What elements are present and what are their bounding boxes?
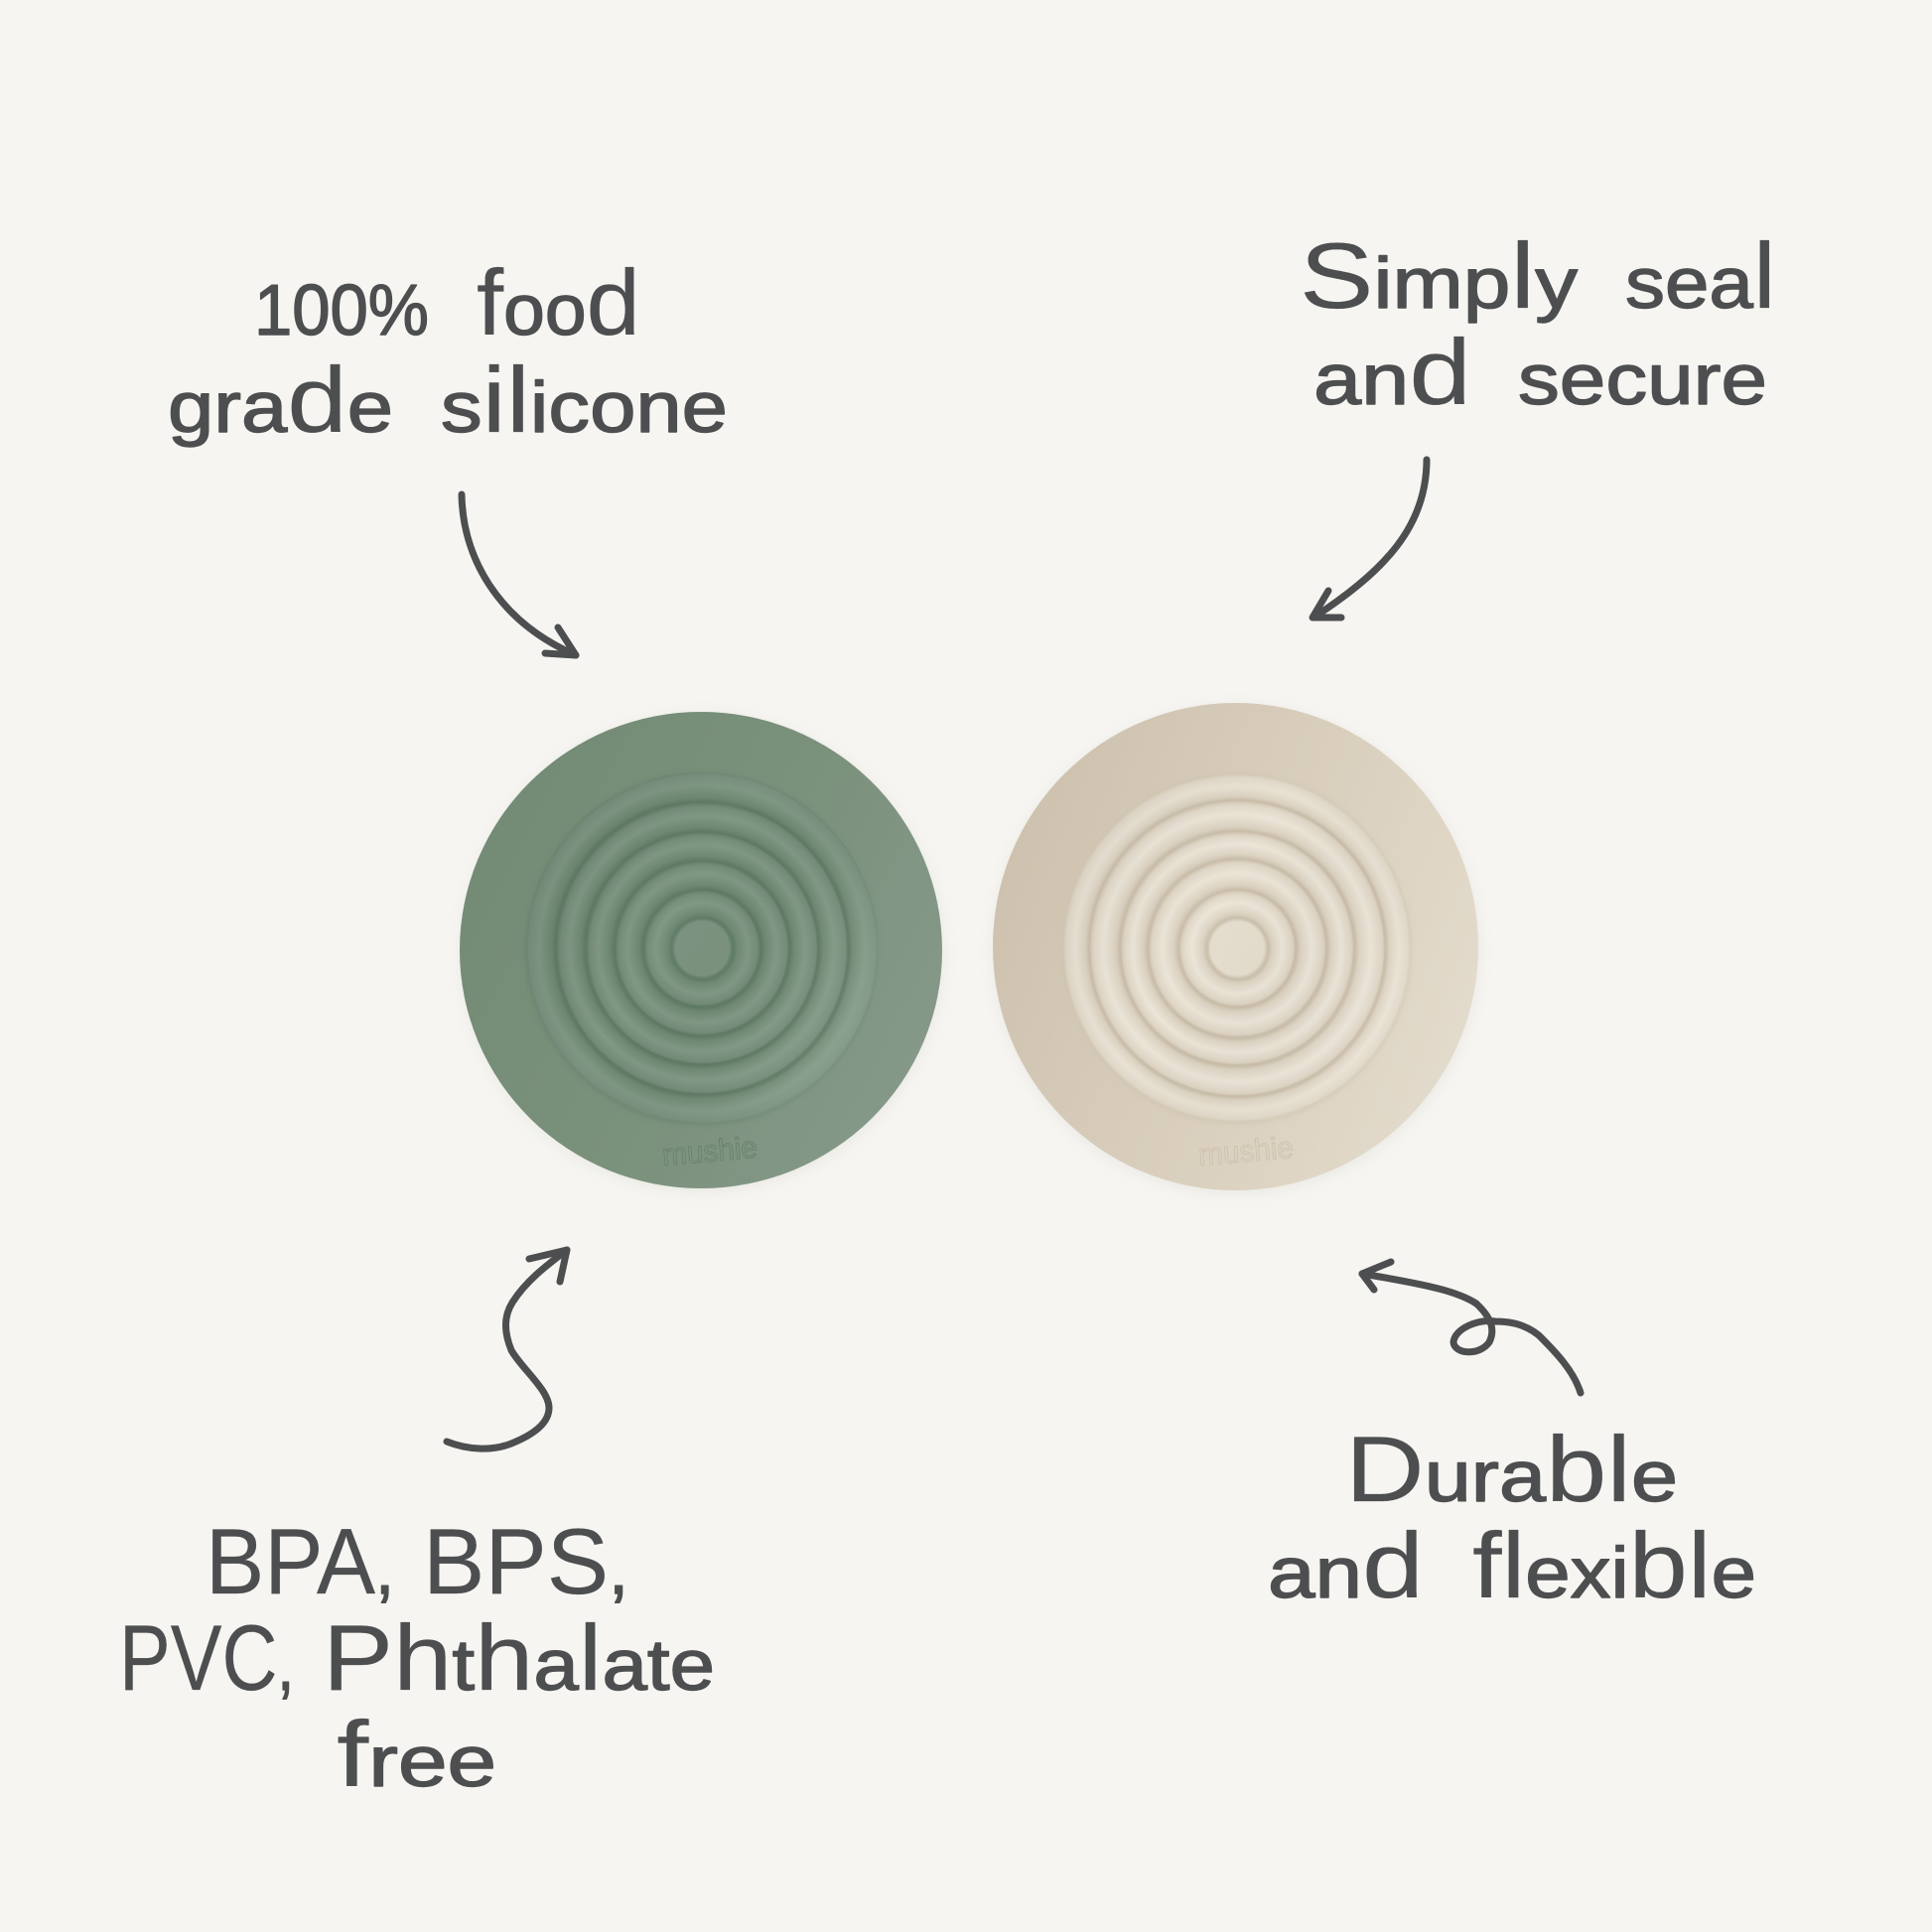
arrow: food grade to green lid	[462, 494, 576, 655]
callout: BPA, BPS, PVC, Phthalate free: BPA,	[206, 1509, 394, 1613]
callout: Durable and flexible: flexible	[1472, 1513, 1756, 1617]
product: cream silicone lid: mushie	[1197, 1130, 1295, 1173]
callout: Simply seal and secure: seal	[1625, 223, 1776, 328]
arrow: durable to cream lid	[1362, 1262, 1581, 1393]
arrow: seal to cream lid	[1312, 460, 1427, 618]
callout: BPA, BPS, PVC, Phthalate free: BPS,	[423, 1509, 628, 1613]
arrow: BPA free to green lid	[447, 1250, 567, 1449]
callout: Simply seal and secure	[1300, 223, 1776, 424]
callout: BPA, BPS, PVC, Phthalate free: free	[337, 1702, 496, 1806]
callout: Durable and flexible: and	[1268, 1513, 1424, 1617]
callout: 100% food grade silicone: 100%	[254, 271, 429, 350]
callout: BPA, BPS, PVC, Phthalate free: Phthalate	[323, 1605, 715, 1710]
callout: BPA, BPS, PVC, Phthalate free	[119, 1509, 715, 1806]
callout: Durable and flexible	[1268, 1417, 1756, 1617]
callout: BPA, BPS, PVC, Phthalate free: PVC,	[119, 1605, 294, 1710]
callout: Simply seal and secure: and	[1313, 320, 1471, 424]
callout: 100% food grade silicone: grade	[168, 347, 393, 452]
callout: Durable and flexible: Durable	[1345, 1417, 1678, 1521]
callout: Simply seal and secure: secure	[1518, 341, 1767, 420]
callout: Simply seal and secure: Simply	[1300, 223, 1578, 328]
product: green silicone lid: mushie	[661, 1130, 759, 1173]
product: green silicone lid	[460, 712, 943, 1192]
callout: 100% food grade silicone	[168, 250, 728, 452]
product: cream silicone lid	[993, 703, 1479, 1194]
callout: 100% food grade silicone: silicone	[441, 347, 728, 452]
callout: 100% food grade silicone: food	[477, 250, 640, 354]
